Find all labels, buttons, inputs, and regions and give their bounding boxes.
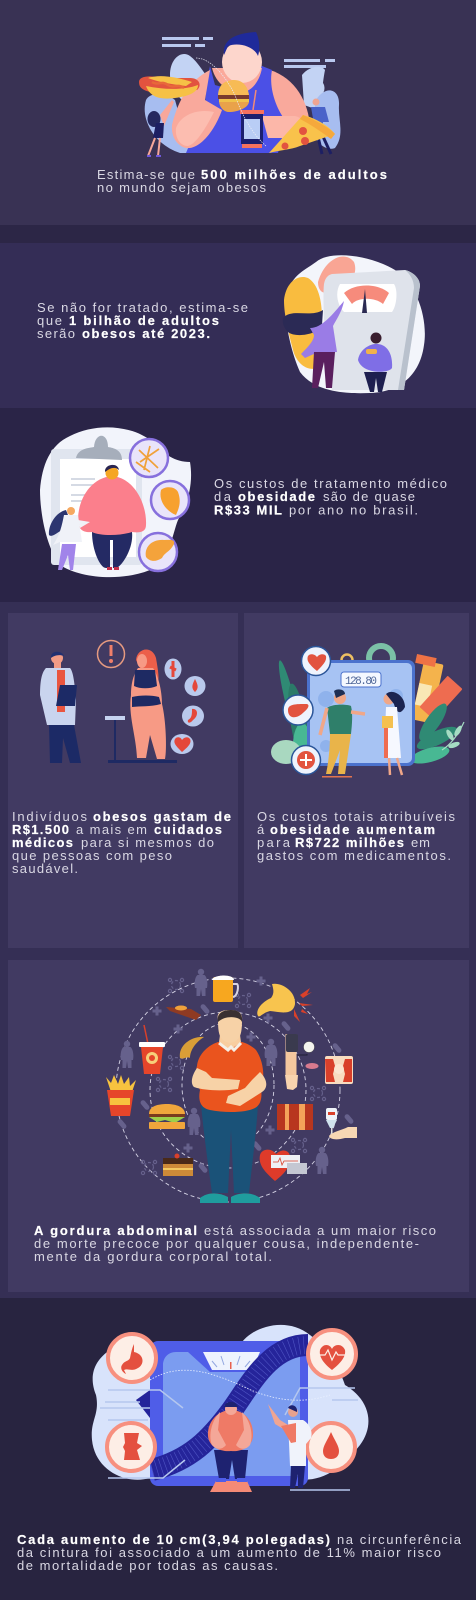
text: treatment costs: da: [214, 489, 232, 504]
scale display reading: 128.80: [345, 676, 377, 688]
band: section 2 background: [0, 243, 476, 408]
text: waist circumference: [17, 1532, 462, 1573]
text: 500 million adults: no mundo sejam obesos: [97, 180, 266, 195]
panel: abdominal fat card: [8, 960, 469, 1292]
text: treatment costs: [214, 476, 447, 518]
text: total costs: [257, 809, 456, 863]
text: 1 billion adults by 2023: [37, 300, 248, 341]
text: total costs: gastos com medicamentos.: [257, 848, 451, 863]
illustration: man eating junk food: [139, 32, 340, 157]
illustration: clipboard, obese patient and organs: [40, 427, 191, 577]
band: section 1 background: [0, 0, 476, 225]
text: obese individuals spend: cuidados: [154, 822, 222, 837]
text: total costs: obesidade aumentam: [270, 822, 435, 837]
text: treatment costs: obesidade: [238, 489, 315, 504]
text: obese individuals spend: [12, 809, 231, 876]
illustration: digital scale, couple, pills and plants: [271, 646, 464, 778]
text: 1 billion adults by 2023: obesos até 2023.: [82, 326, 210, 341]
text: 1 billion adults by 2023: que: [37, 313, 62, 328]
text: waist circumference: Cada aumento de 10 cm(3,94 polegadas): [17, 1532, 330, 1547]
text: abdominal fat: de morte precoce por qualquer cousa, independente-: [34, 1236, 419, 1251]
text: obese individuals spend: R$1.500: [12, 822, 69, 837]
text: treatment costs: Os custos de tratamento médico: [214, 476, 447, 491]
text: waist circumference: de mortalidade por todas as causas.: [17, 1558, 278, 1573]
text: total costs: Os custos totais atribuíveis: [257, 809, 456, 824]
text: obese individuals spend: para si mesmos do: [81, 835, 214, 850]
text: abdominal fat: A gordura abdominal: [34, 1223, 197, 1238]
illustration: abdominal fat diagram: [106, 969, 357, 1203]
band: separator: [0, 225, 476, 243]
band: section 3 background: [0, 408, 476, 602]
text: treatment costs: por ano no brasil.: [289, 502, 418, 518]
text: abdominal fat: está associada a um maior risco: [204, 1223, 436, 1238]
text: 1 billion adults by 2023: serão: [37, 326, 75, 341]
illustration: woman and giant weight scale: [283, 255, 425, 393]
text: total costs: para: [257, 835, 291, 850]
text: total costs: R$722 milhões: [295, 835, 404, 850]
text: total costs: á: [257, 822, 265, 837]
text: obese individuals spend: saudável.: [12, 861, 78, 876]
text: 1 billion adults by 2023: 1 bilhão de adultos: [69, 313, 219, 328]
text: 500 million adults: Estima-se que: [97, 167, 195, 182]
text: obese individuals spend: a mais em: [76, 822, 147, 837]
text: 500 million adults: [97, 167, 387, 195]
band: section 6 background: [0, 1298, 476, 1600]
text: obese individuals spend: médicos: [12, 835, 73, 850]
text: obese individuals spend: Indivíduos: [12, 809, 88, 824]
text: treatment costs: são de quase: [323, 489, 415, 504]
text: waist circumference: na circunferência: [337, 1532, 462, 1547]
text: waist circumference: da cintura foi associado a um aumento de 11% maior risco: [17, 1545, 441, 1560]
illustration: doctor and woman on scale: [40, 640, 206, 763]
text: 1 billion adults by 2023: Se não for tratado, estima-se: [37, 300, 248, 315]
text: obese individuals spend: que pessoas com peso: [12, 848, 172, 863]
text: abdominal fat: mente da gordura corporal total.: [34, 1249, 272, 1264]
text: treatment costs: R$33 MIL: [214, 502, 282, 518]
text: total costs: em: [411, 835, 430, 850]
panel: left card: [8, 613, 238, 948]
panel: right card: [244, 613, 469, 948]
text: obese individuals spend: obesos gastam de: [93, 809, 231, 824]
text: 500 million adults: 500 milhões de adultos: [201, 167, 387, 182]
illustration: waist measuring tape and scale: [92, 1325, 368, 1492]
text: abdominal fat: [34, 1223, 436, 1264]
